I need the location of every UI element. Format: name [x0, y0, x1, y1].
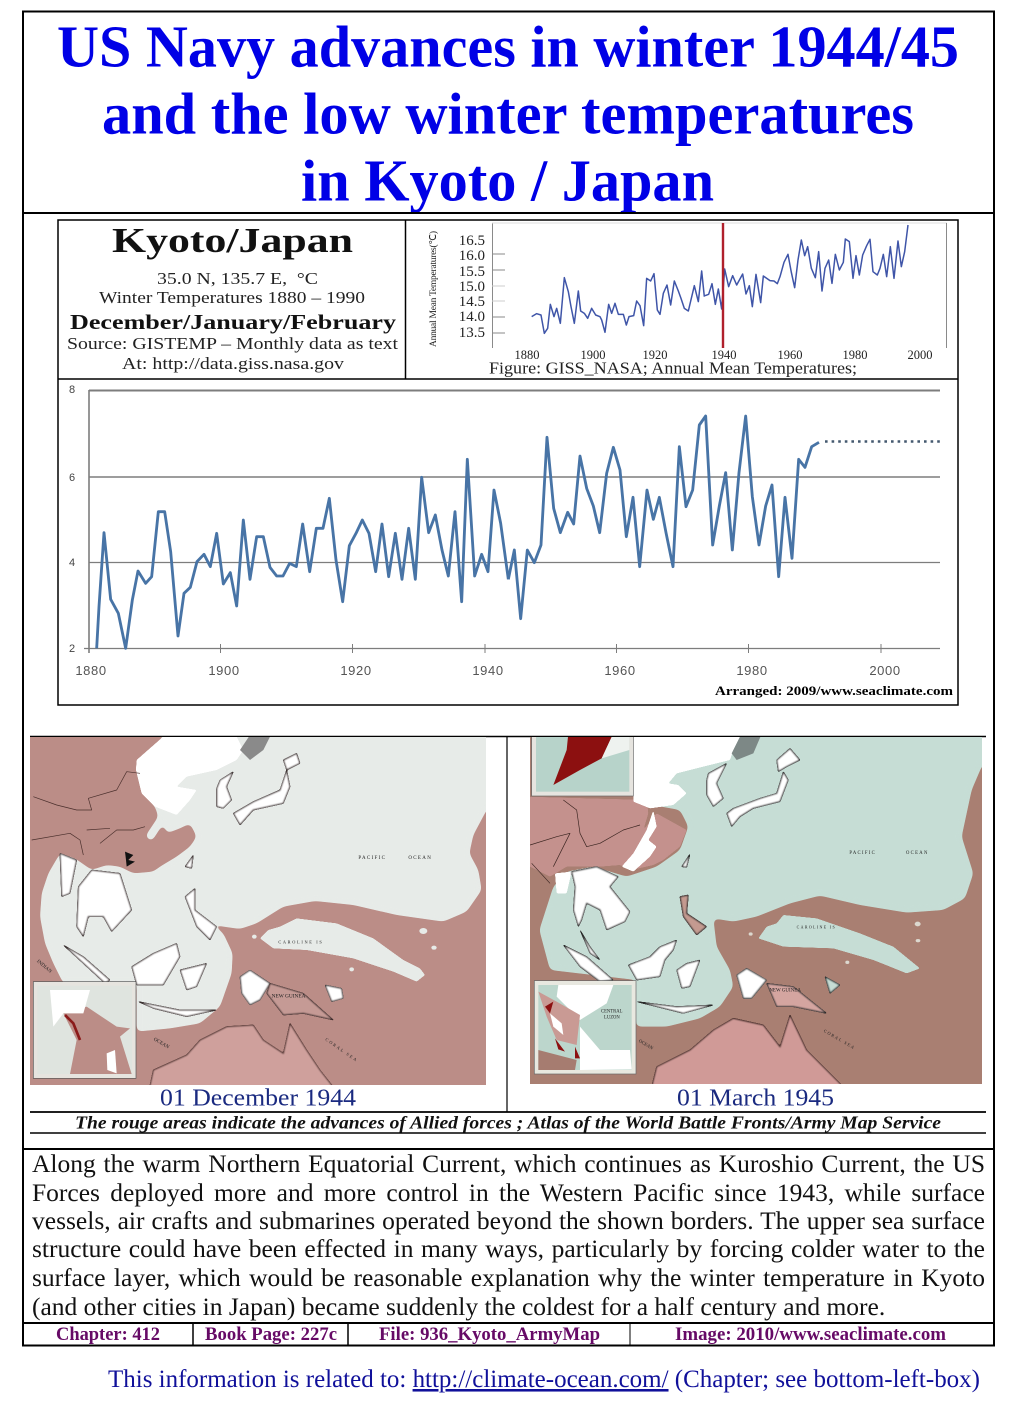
chart: GISS NASA annual mean temperatures: [428, 222, 947, 378]
x axis labels: [75, 663, 901, 678]
Soviet territory: [732, 730, 763, 760]
map labels: [637, 851, 929, 1052]
land masses: [60, 730, 343, 1017]
x axis labels: 1980: [736, 663, 768, 678]
panel: station information: Winter Temperatures 1880 – 1990: [99, 288, 365, 307]
Philippines: [680, 895, 707, 935]
grid lines: [84, 390, 940, 653]
Allied controlled area: [530, 737, 982, 1084]
x axis labels: 1920: [642, 348, 668, 362]
x axis labels: 1940: [472, 663, 504, 678]
map labels: CAROLINE IS: [278, 939, 323, 944]
x axis labels: 1880: [514, 348, 540, 362]
map labels: OCEAN: [408, 856, 432, 861]
text block: explanation: Along the warm Northern Equatorial Current, which continues as Kuroshio Current, the US: [32, 1149, 985, 1178]
contested area in China: [125, 852, 135, 867]
Solomon area: [825, 977, 840, 993]
Japanese held area: [40, 720, 503, 1032]
China rivers and borders: [32, 772, 145, 855]
y axis labels: [69, 384, 75, 655]
related link line: This information is related to: http://climate-ocean.com/ (Chapter; see bottom-left-box): [108, 1364, 980, 1393]
inset: Central Luzon: LUZON: [604, 1016, 620, 1021]
y axis labels: [459, 233, 485, 341]
y axis labels: 16.0: [459, 248, 485, 264]
panel: station information: [67, 221, 398, 373]
y axis title: Annual Mean Temperatures(℃): [428, 231, 439, 347]
y axis labels: 14.0: [459, 309, 485, 325]
x axis labels: 1960: [778, 348, 802, 362]
Australia: [650, 1015, 850, 1093]
Soviet territory: [240, 730, 273, 760]
y axis labels: 2: [69, 643, 75, 655]
map labels: CAROLINE IS: [797, 924, 836, 929]
Australia: [148, 1023, 338, 1093]
text block: explanation: surface layer, which would be reasonable explanation why the winter temperature in Kyoto: [32, 1263, 985, 1292]
chart: Kyoto winter temperatures: [69, 384, 953, 698]
title: in Kyoto / Japan: [301, 148, 714, 212]
small islands: [749, 922, 921, 964]
map labels: PACIFIC: [358, 856, 386, 861]
1940 marker: [722, 223, 724, 348]
title: US Navy advances in winter 1944/45: [57, 14, 959, 80]
footer reference bar: Image: 2010/www.seaclimate.com: [675, 1325, 947, 1345]
x axis labels: 1980: [842, 348, 868, 362]
Allied controlled area: [30, 737, 486, 1087]
footer reference bar: Book Page: 227c: [205, 1325, 337, 1345]
map labels: OCEAN: [152, 1037, 170, 1051]
inset: Central Luzon: CENTRAL: [601, 1010, 623, 1015]
China free area: [523, 797, 687, 877]
x axis labels: 1940: [712, 348, 736, 362]
map: 01 March 1945: [530, 737, 982, 1084]
map labels: INDIAN: [35, 959, 52, 975]
China rivers and borders: [530, 800, 640, 883]
y axis labels: 14.5: [459, 294, 485, 310]
panel: station information: Source: GISTEMP – Monthly data as text: [67, 334, 398, 353]
x axis labels: 1960: [604, 663, 636, 678]
footer reference bar: [56, 1324, 947, 1345]
text block: explanation: (and other cities in Japan) became suddenly the coldest for a half century and more.: [32, 1292, 885, 1321]
text block: explanation: [32, 1149, 985, 1321]
y axis labels: 6: [69, 472, 75, 484]
y axis labels: 16.5: [459, 233, 485, 249]
New Guinea: [267, 983, 333, 1020]
figure caption: Figure: GISS_NASA; Annual Mean Temperatures;: [489, 358, 857, 378]
map: 01 December 1944: [30, 737, 486, 1085]
chart panel frame: [57, 219, 959, 706]
map labels: PACIFIC: [849, 851, 876, 856]
axes: [492, 223, 947, 348]
text block: explanation: Forces deployed more and more control in the Western Pacific since 1943, while surface: [32, 1178, 985, 1207]
y axis labels: 4: [69, 557, 75, 569]
footer reference bar: Chapter: 412: [56, 1325, 160, 1345]
inset: Iwo Jima: [532, 733, 633, 796]
temperature line: [97, 459, 508, 648]
caption: map source: The rouge areas indicate the advances of Allied forces ; Atlas of the World Battle Fronts/Army Map Service: [75, 1113, 941, 1132]
inset: Central Luzon: [534, 981, 636, 1074]
text block: explanation: structure could have been effected in many ways, particularly by forcing colder water to the: [32, 1234, 985, 1263]
y axis labels: 15.5: [459, 264, 485, 280]
title: [57, 14, 959, 212]
panel: station information: Kyoto/Japan: [112, 221, 353, 260]
footer reference bar: File: 936_Kyoto_ArmyMap: [379, 1325, 600, 1345]
credit: Arranged: 2009/www.seaclimate.com: [715, 683, 953, 698]
y axis labels: 15.0: [459, 279, 485, 295]
temperature line: [532, 271, 704, 333]
x axis labels: 2000: [869, 663, 901, 678]
map section rules: [30, 736, 986, 1134]
Caroline Islands area: [260, 918, 425, 982]
x axis labels: 1920: [340, 663, 372, 678]
y axis labels: 13.5: [459, 325, 485, 341]
projection dotted line: [825, 440, 940, 443]
text block: explanation: vessels, air crafts and submarines operated beyond the shown borders. The upper sea surface: [32, 1206, 985, 1235]
panel: station information: December/January/February: [70, 310, 397, 334]
x axis labels: 2000: [908, 348, 932, 362]
x axis labels: 1880: [75, 663, 107, 678]
inset: Leyte: [33, 982, 136, 1078]
map labels: [35, 856, 432, 1063]
x axis labels: [514, 348, 932, 362]
land masses: [555, 730, 800, 1013]
x axis labels: 1900: [208, 663, 240, 678]
title: and the low winter temperatures: [102, 80, 914, 146]
map labels: OCEAN: [637, 1039, 654, 1052]
x axis labels: 1900: [580, 348, 606, 362]
panel: station information: At: http://data.giss.nasa.gov: [122, 354, 345, 373]
y axis labels: 8: [69, 384, 75, 396]
map labels: NEW GUINEA: [272, 994, 306, 1000]
New Guinea: [767, 983, 827, 1013]
Caroline Islands area: [758, 915, 920, 973]
panel: station information: 35.0 N, 135.7 E, °C: [157, 269, 318, 288]
map labels: CORAL SEA: [823, 1028, 856, 1050]
Japanese held area: [539, 720, 1000, 1027]
map labels: NEW GUINEA: [769, 988, 801, 993]
small islands: [252, 928, 437, 971]
map labels: CORAL SEA: [324, 1037, 359, 1063]
map labels: OCEAN: [906, 851, 929, 856]
